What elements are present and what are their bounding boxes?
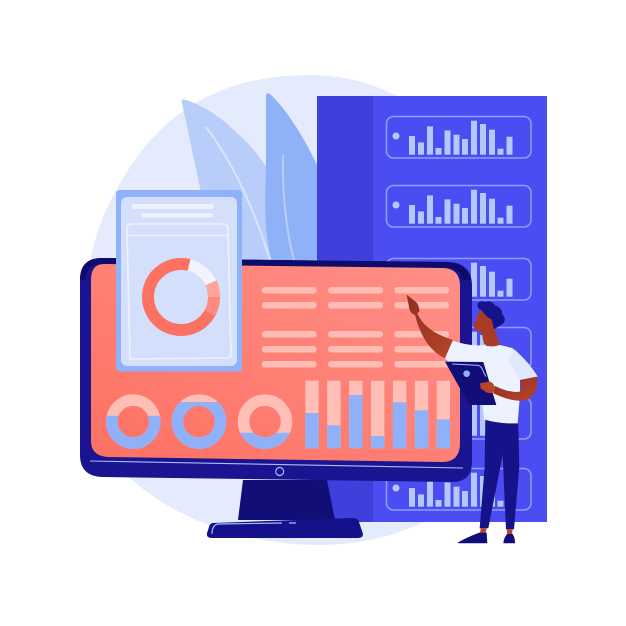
server row 5 bbox=[386, 398, 531, 439]
floating report card bbox=[116, 190, 242, 372]
screen bbox=[91, 264, 460, 462]
legs bbox=[480, 420, 519, 529]
power button bbox=[276, 468, 284, 476]
ankles bbox=[480, 528, 513, 535]
monitor stand bbox=[238, 480, 335, 520]
monitor body bbox=[80, 258, 472, 482]
server row 6 bbox=[386, 468, 531, 510]
background blob bbox=[90, 75, 520, 545]
server row 4 bbox=[386, 328, 531, 369]
donut chart bbox=[148, 264, 214, 330]
server row 1 bbox=[386, 116, 531, 158]
person presenting bbox=[407, 295, 538, 543]
text lines on screen bbox=[262, 287, 449, 368]
tablet bbox=[445, 362, 496, 405]
face and neck bbox=[473, 311, 500, 346]
server row 3 bbox=[386, 258, 531, 300]
other arm bbox=[493, 377, 537, 401]
shoes bbox=[458, 533, 515, 543]
shirt bbox=[445, 341, 538, 423]
icon: right leaf bbox=[265, 93, 317, 262]
bar chart on screen bbox=[305, 381, 450, 448]
hair bbox=[477, 301, 505, 329]
pointing arm bbox=[407, 295, 453, 358]
monitor base bbox=[207, 518, 363, 538]
bottom donut charts bbox=[112, 400, 286, 443]
icon: left leaf bbox=[181, 99, 318, 262]
panel: server rack bbox=[317, 96, 547, 522]
server row 2 bbox=[386, 186, 531, 227]
hand bbox=[480, 381, 495, 393]
